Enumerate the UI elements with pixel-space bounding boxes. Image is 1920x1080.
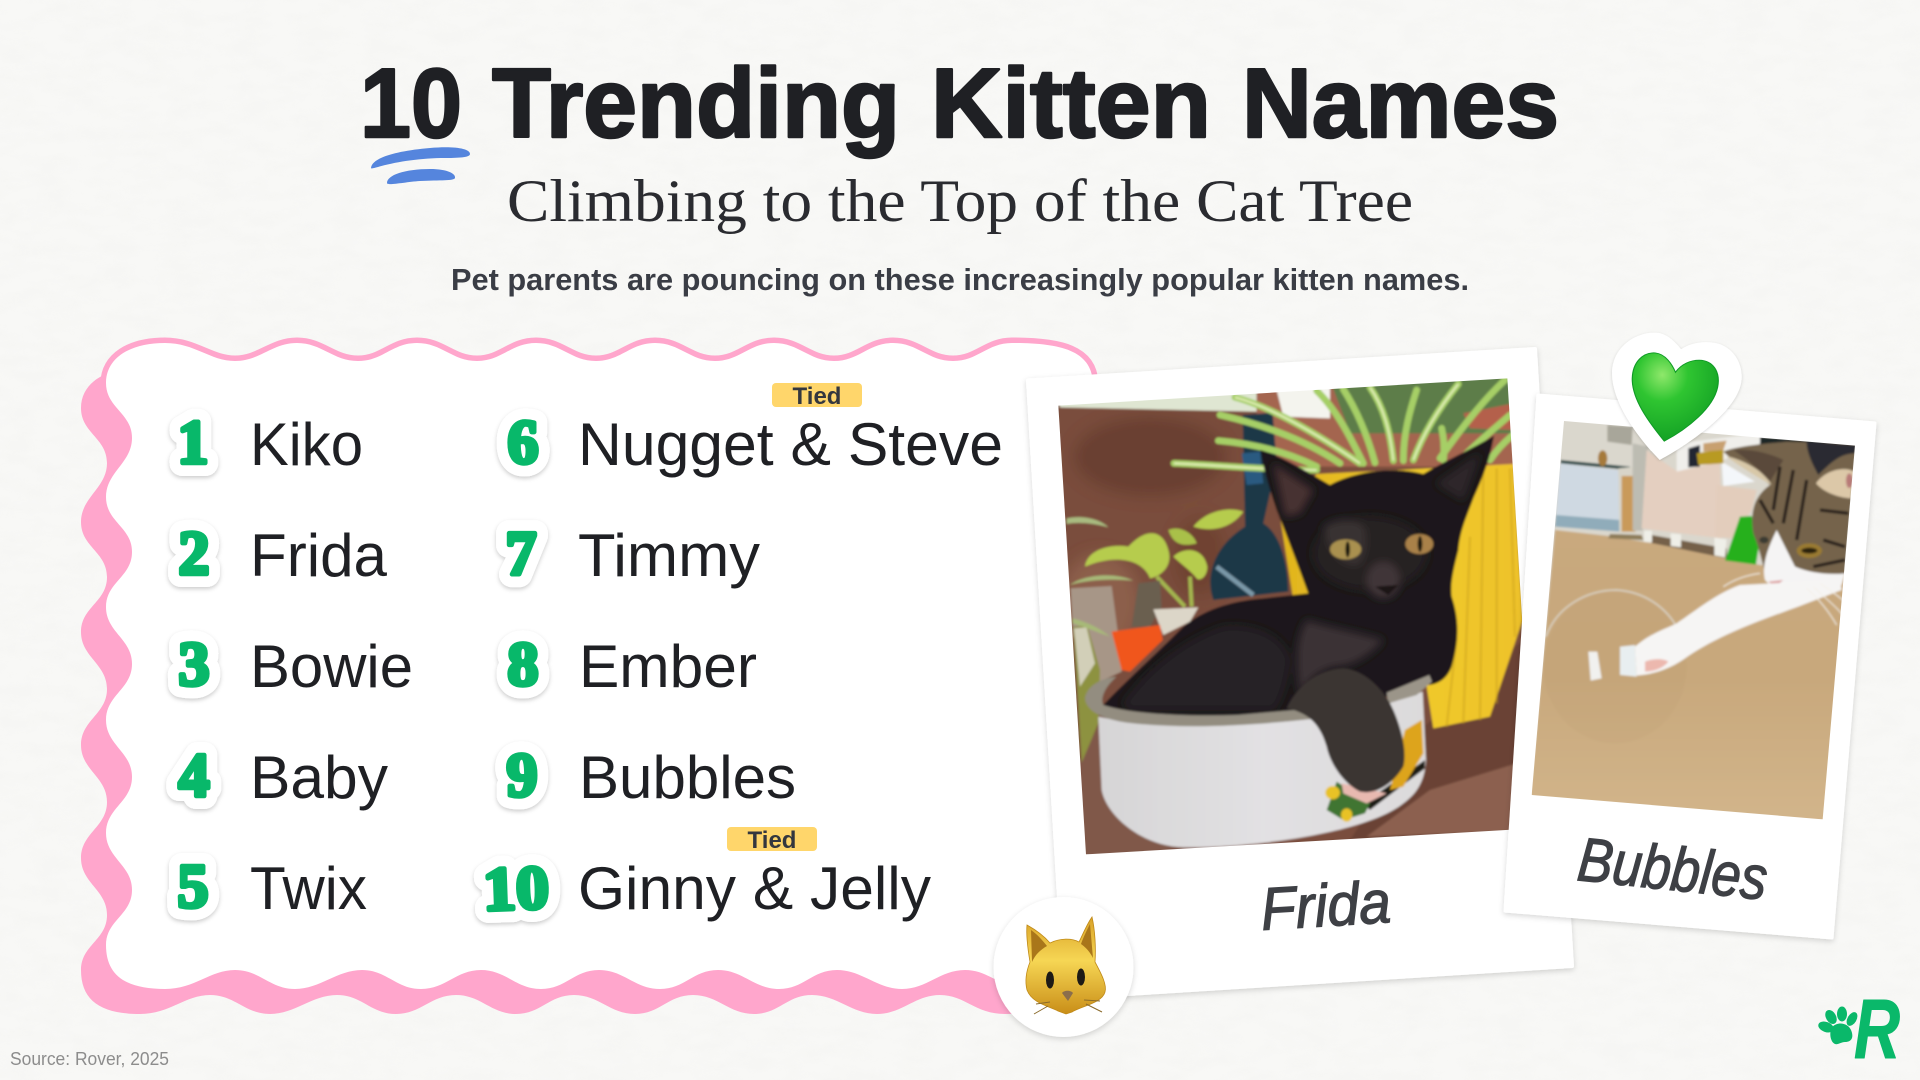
rank number stickers: 5 [178, 853, 208, 921]
title: 10 [360, 48, 462, 158]
kitten paw [1287, 668, 1405, 792]
spider plant leaves [1174, 380, 1512, 470]
glass and vase [1071, 586, 1122, 682]
tag: tied for tenth [727, 827, 817, 854]
rank number stickers: 8 [508, 631, 538, 699]
rank number stickers: 5 [178, 853, 208, 921]
rank number stickers: 2 [178, 520, 210, 588]
tag: tied for tenth: Tied [748, 827, 796, 854]
bowl body [1098, 692, 1426, 847]
bowl rim [1085, 677, 1317, 726]
title: Names [1242, 48, 1559, 158]
cat blaze and cheek [1764, 530, 1845, 590]
names column two: Timmy [578, 522, 760, 589]
names column one: Kiko [250, 411, 363, 478]
rank number stickers: 2 [178, 520, 210, 588]
polaroid: Frida [1028, 349, 1572, 998]
names column two: Nugget & Steve [578, 411, 1003, 478]
title: Trending [492, 48, 900, 158]
names column one: Bowie [250, 633, 413, 700]
polaroid: Bubbles [1505, 395, 1887, 938]
names column one: Frida [250, 522, 388, 589]
source note: Source: Rover, 2025 [10, 1049, 169, 1069]
rank number stickers: 4 [178, 742, 210, 810]
rank number stickers: 7 [506, 520, 536, 588]
names column two: Bubbles [579, 744, 796, 811]
names column one [250, 411, 413, 922]
icon: cat face sticker [994, 897, 1134, 1037]
card white wavy panel [106, 343, 1093, 989]
names column two: Ginny & Jelly [578, 855, 931, 922]
title [360, 48, 1559, 158]
subtitle: Climbing to the Top of the Cat Tree [507, 168, 1413, 234]
kitten silhouette [1102, 436, 1494, 717]
rank number stickers: 1 [178, 409, 208, 477]
description: Pet parents are pouncing on these increasingly popular kitten names. [451, 262, 1469, 297]
title: Kitten [931, 48, 1211, 158]
rank number stickers: 3 [178, 631, 210, 699]
wordmark R: R [1854, 982, 1900, 1076]
rank number stickers: 6 [508, 409, 538, 477]
cat head [1723, 442, 1857, 585]
rank number stickers: 9 [506, 742, 538, 810]
orange cup [1112, 625, 1163, 672]
rank number stickers: 3 [178, 631, 210, 699]
rank number stickers: 10 [482, 854, 550, 924]
caption: Frida: Frida [1259, 868, 1393, 943]
rank number stickers: 7 [506, 520, 536, 588]
dark bottle [1210, 413, 1288, 600]
tag: tied for sixth [772, 383, 862, 410]
rank number stickers: 10 [482, 854, 550, 924]
rank number stickers: 4 [178, 742, 210, 810]
names column one: Twix [250, 855, 367, 922]
left ground [1080, 730, 1170, 854]
rank number stickers: 8 [508, 631, 538, 699]
cat leg [1635, 580, 1842, 676]
polaroid frame [1505, 395, 1875, 938]
caption: Bubbles: Bubbles [1575, 825, 1771, 914]
small plant [1067, 510, 1243, 637]
bowl sunflower decoration [1363, 760, 1425, 810]
right ground [1352, 643, 1520, 839]
carpet [1530, 530, 1857, 822]
names column two: Ember [579, 633, 757, 700]
rank number stickers: 9 [506, 742, 538, 810]
logo: Rover paw and R [1817, 982, 1900, 1076]
icon: blue underline strokes under 10 [371, 147, 470, 184]
icon: green heart sticker [1612, 333, 1742, 460]
names column two [578, 411, 1003, 922]
kitten fur highlights [1123, 453, 1480, 710]
top background [1058, 390, 1257, 412]
under-cabinet shadow and feet [1652, 535, 1727, 558]
photo: black kitten in a bowl [1058, 378, 1522, 854]
photo: tabby cat batting a bubble [1532, 421, 1855, 820]
icon: paw [1817, 1006, 1860, 1044]
bubble [1543, 590, 1687, 743]
panel: ranked names card [81, 343, 1093, 1014]
card pink offset shadow [81, 368, 1068, 1014]
names column one: Baby [250, 744, 388, 811]
tag: tied for sixth: Tied [793, 383, 841, 410]
green bag [1725, 516, 1759, 565]
rank number stickers [178, 409, 550, 924]
yellow pot [1280, 464, 1523, 728]
rank number stickers: 6 [508, 409, 538, 477]
polaroid frame [1028, 349, 1572, 998]
rank number stickers: 1 [178, 409, 208, 477]
